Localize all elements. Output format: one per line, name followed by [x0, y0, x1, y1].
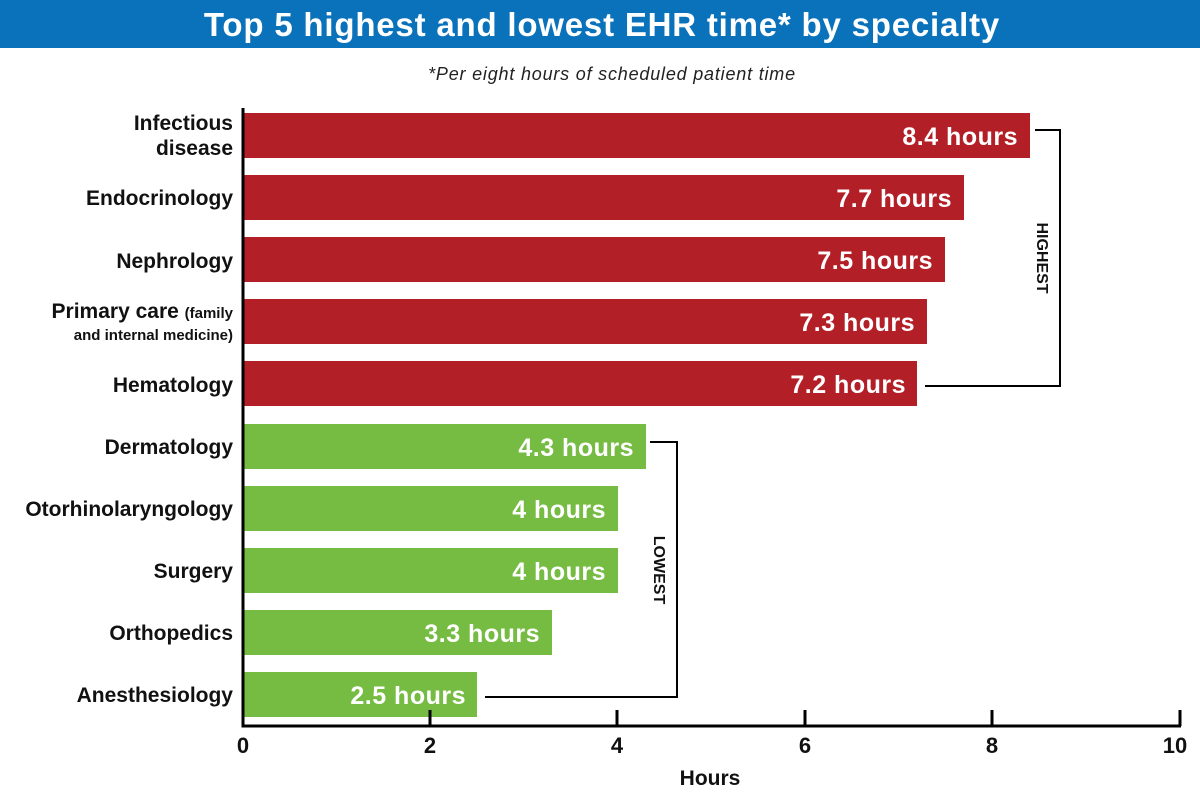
bracket: lowest: LOWEST	[650, 536, 667, 604]
axis tick labels	[237, 733, 1187, 758]
subtitle: *Per eight hours of scheduled patient time	[428, 64, 796, 84]
category labels: Dermatology	[105, 436, 233, 459]
value labels: 7.3 hours	[799, 309, 915, 337]
category labels: Primary care (family	[52, 300, 234, 323]
axes	[243, 108, 1181, 726]
axis tick labels: 2	[424, 733, 436, 758]
axis tick labels: 10	[1163, 733, 1187, 758]
category labels: Anesthesiology	[77, 684, 233, 707]
value labels: 2.5 hours	[350, 682, 466, 710]
value labels: 7.5 hours	[817, 247, 933, 275]
category labels: Otorhinolaryngology	[25, 498, 233, 521]
bars: lowest	[243, 424, 646, 717]
value labels: 7.7 hours	[836, 185, 952, 213]
value labels: 4 hours	[512, 496, 606, 524]
value labels: 3.3 hours	[424, 620, 540, 648]
category labels: Orthopedics	[109, 622, 233, 645]
bracket: lowest	[485, 442, 677, 697]
value labels: 4.3 hours	[518, 434, 634, 462]
value labels	[350, 123, 1018, 710]
value labels: 4 hours	[512, 558, 606, 586]
title	[0, 0, 1200, 48]
category labels: Hematology	[113, 374, 233, 397]
bracket: highest: HIGHEST	[1033, 222, 1050, 294]
axis tick labels: 8	[986, 733, 998, 758]
category labels: Nephrology	[116, 250, 233, 273]
category labels: Endocrinology	[86, 187, 233, 210]
axis tick labels: 4	[611, 733, 624, 758]
category labels: and internal medicine)	[74, 327, 233, 344]
axis tick labels: 0	[237, 733, 249, 758]
category labels: Surgery	[154, 560, 233, 583]
axis tick labels: 6	[799, 733, 811, 758]
value labels: 8.4 hours	[902, 123, 1018, 151]
axis title: Hours	[680, 767, 740, 790]
value labels: 7.2 hours	[790, 371, 906, 399]
bars: highest	[243, 113, 1030, 406]
category labels: Infectious	[134, 112, 233, 135]
bracket: highest	[925, 130, 1060, 386]
category labels	[25, 112, 234, 707]
category labels: disease	[156, 137, 233, 160]
title: Top 5 highest and lowest EHR time* by specialty	[204, 6, 1000, 43]
